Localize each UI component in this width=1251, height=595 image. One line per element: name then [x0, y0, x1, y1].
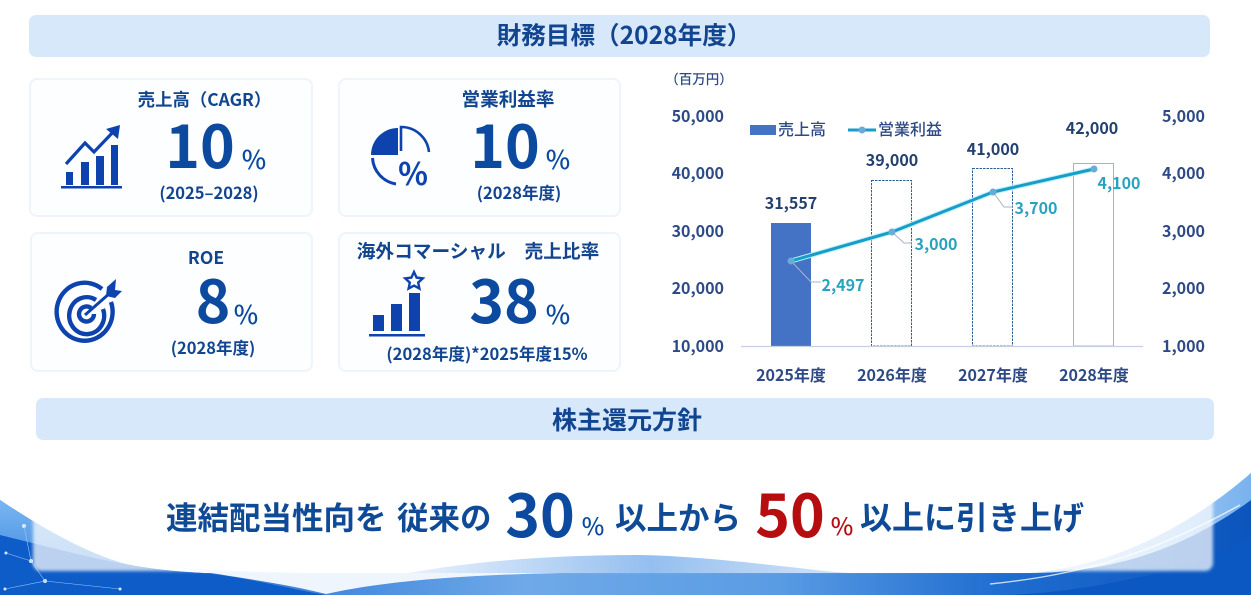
category labels: 2026年度	[857, 362, 927, 386]
heading: ROE: ROE	[188, 245, 224, 270]
right axis labels: 4,000	[1162, 160, 1205, 184]
value: 30 percent: 30	[505, 469, 575, 554]
background wave	[0, 473, 1251, 595]
operating profit value labels: 3,700	[1015, 195, 1057, 219]
value: 10 percent: %	[242, 140, 266, 177]
value: 50 percent: 50	[755, 469, 825, 554]
note: fiscal year: (2028年度)	[477, 180, 561, 204]
category labels	[756, 362, 1129, 386]
heading: revenue CAGR: 売上高（CAGR）	[138, 87, 271, 112]
revenue bars	[771, 164, 1114, 346]
revenue value labels: 31,557	[765, 190, 817, 214]
callout: dividend payout	[166, 469, 1084, 554]
category labels: 2028年度	[1059, 362, 1129, 386]
axis baseline	[741, 346, 1143, 348]
heading: overseas commercial: 海外コマーシャル 売上比率	[357, 237, 599, 264]
value: 50 percent: %	[831, 507, 853, 542]
callout: dividend payout: 連結配当性向を	[166, 493, 387, 539]
heading: operating margin: 営業利益率	[462, 85, 554, 112]
revenue value labels: 39,000	[866, 147, 918, 171]
heading bar: financial targets: 財務目標（2028年度）	[497, 16, 751, 52]
operating profit value labels: 4,100	[1098, 170, 1140, 194]
leader lines	[791, 192, 1013, 282]
right axis labels: 2,000	[1162, 275, 1205, 299]
operating profit value labels: 2,497	[822, 272, 864, 296]
note: period: (2025–2028)	[159, 180, 259, 204]
left axis labels: 20,000	[672, 275, 724, 299]
value: 38 percent	[469, 255, 570, 340]
value: 38 percent: 38	[469, 255, 539, 340]
right axis labels: 5,000	[1162, 103, 1205, 127]
value: 30 percent: %	[582, 507, 604, 542]
icon: rising bar chart	[61, 125, 122, 188]
chart: revenue and operating profit	[665, 68, 1205, 386]
legend	[750, 116, 942, 140]
note: fiscal year: (2028年度)	[171, 335, 255, 359]
value: 8 percent: %	[234, 295, 258, 332]
category labels: 2027年度	[958, 362, 1028, 386]
value: 10 percent	[165, 100, 266, 185]
left axis labels: 30,000	[672, 218, 724, 242]
revenue value labels: 41,000	[967, 136, 1019, 160]
icon: pie percent	[371, 127, 429, 194]
value: 8 percent: 8	[196, 255, 230, 340]
revenue value labels	[765, 115, 1118, 214]
value: 10 percent: %	[546, 140, 570, 177]
unit label: （百万円）	[665, 68, 733, 88]
legend: 営業利益	[878, 116, 942, 140]
operating profit line	[788, 166, 1098, 264]
category labels: 2025年度	[756, 362, 826, 386]
left axis labels: 10,000	[672, 333, 724, 357]
callout: dividend payout: 以上に引き上げ	[860, 493, 1084, 539]
panel: dividend policy backdrop	[33, 463, 1213, 571]
panel: overseas commercial sales ratio	[339, 233, 620, 371]
panel: operating margin	[339, 79, 620, 216]
left axis labels: 40,000	[672, 160, 724, 184]
legend: 売上高	[778, 116, 826, 140]
icon: target with arrow	[57, 279, 122, 341]
icon: bars with star	[369, 272, 425, 336]
wave highlight	[408, 555, 850, 573]
heading bar: shareholder return: 株主還元方針	[552, 401, 702, 437]
revenue value labels: 42,000	[1066, 115, 1118, 139]
left axis labels: 50,000	[672, 103, 724, 127]
callout: dividend payout: 以上から	[615, 493, 741, 539]
value: 8 percent	[196, 255, 258, 340]
right axis labels: 1,000	[1162, 333, 1205, 357]
network dots	[4, 524, 122, 590]
note: fiscal year and 2025 comparison: (2028年度)*2025年度15%	[386, 341, 588, 365]
left axis labels	[672, 103, 724, 357]
panel: revenue CAGR	[30, 79, 312, 216]
value: 38 percent: %	[546, 295, 570, 332]
heading bar: shareholder return	[36, 398, 1214, 440]
operating profit value labels: 3,000	[915, 231, 957, 255]
right axis labels: 3,000	[1162, 218, 1205, 242]
panel: ROE	[31, 233, 312, 371]
heading bar: financial targets	[29, 15, 1210, 57]
operating profit value labels	[822, 170, 1140, 296]
callout: dividend payout: 従来の	[397, 493, 492, 539]
icon: pie percent: %	[398, 149, 428, 194]
value: 10 percent: 10	[470, 100, 540, 185]
right axis labels	[1162, 103, 1205, 357]
value: 10 percent: 10	[165, 100, 235, 185]
value: 10 percent	[470, 100, 570, 185]
